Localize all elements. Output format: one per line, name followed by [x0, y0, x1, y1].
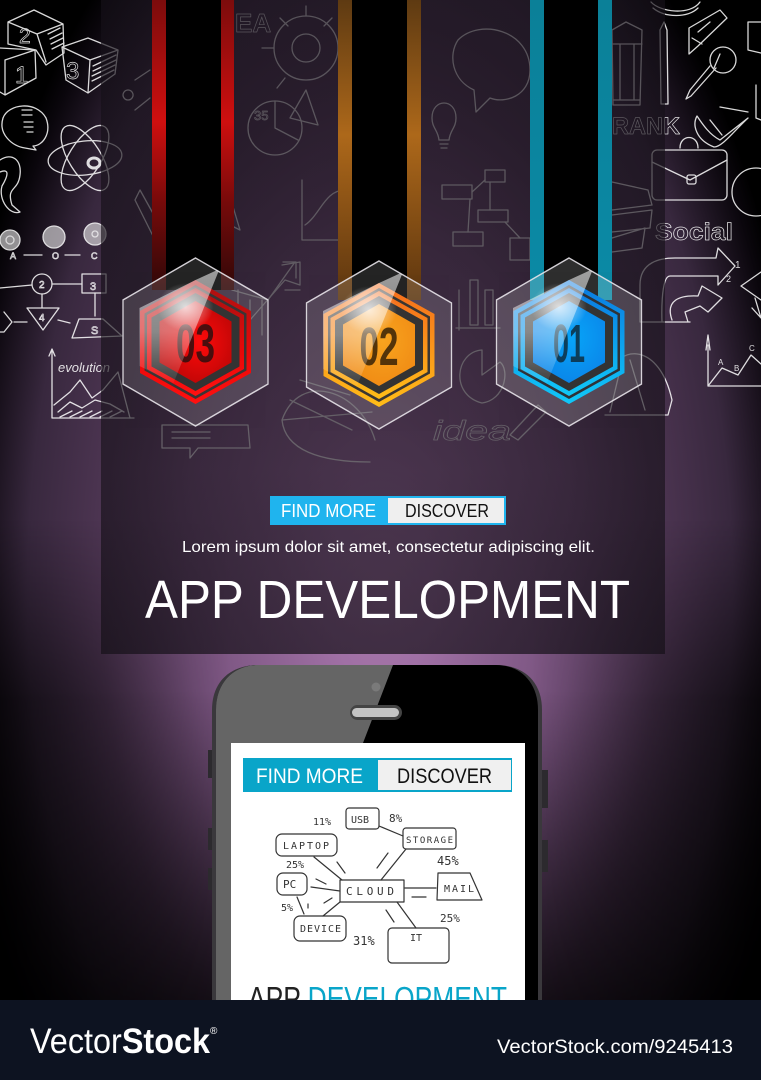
badge: 02 [306, 261, 452, 429]
doodle: evolution chart [49, 349, 134, 418]
doodle: flowchart: S [91, 325, 98, 337]
number: 02 [360, 317, 398, 377]
doodle: RANK: RANK [612, 113, 681, 140]
percent labels: 11% [313, 817, 331, 828]
doodles: under panel [123, 6, 681, 462]
arrows [308, 853, 426, 922]
doodle: arrows: 2 [726, 274, 731, 284]
badge: 01 [496, 258, 642, 426]
doodle: book stack [612, 182, 652, 252]
doodle: bars [456, 280, 500, 330]
glare [140, 269, 220, 383]
node: DEVICE: DEVICE [300, 924, 341, 935]
doodle: atom [46, 118, 124, 198]
doodle: discs: A [10, 251, 16, 261]
doodle: flowchart: 2 [39, 280, 45, 291]
number: 01 [553, 314, 585, 374]
percent labels: 31% [353, 934, 375, 948]
node: MAIL: MAIL [444, 884, 474, 895]
doodle: arrows [640, 248, 741, 322]
doodle: glasses [695, 107, 748, 147]
node: CLOUD [340, 880, 404, 902]
percent labels: 8% [389, 812, 403, 825]
node: USB [346, 808, 379, 829]
percent labels: 5% [281, 903, 293, 914]
panel: dark overlay [101, 0, 665, 654]
doodle: discs: O [52, 251, 59, 261]
phone title: APP DEVELOPMENT [248, 980, 507, 1017]
percent labels: 25% [286, 860, 304, 871]
node: IT: IT [410, 933, 422, 944]
button: find more / discover [270, 496, 506, 525]
node: PC: PC [283, 878, 296, 891]
phone button: DISCOVER [397, 765, 492, 788]
doodle: discs [0, 223, 106, 261]
glare [323, 272, 403, 386]
doodle: pencil small [510, 405, 546, 440]
node: CLOUD: CLOUD [346, 885, 394, 898]
cloud diagram [276, 808, 482, 963]
doodle: keyboard bubble [162, 425, 250, 458]
doodle: Social: Social [655, 219, 733, 246]
footer registered mark: ® [210, 1026, 218, 1037]
doodle: mushroom sketch [605, 354, 672, 415]
phone body [212, 665, 542, 1005]
phone glare [216, 665, 393, 1005]
node: USB: USB [351, 815, 369, 826]
doodle: pie sketch [460, 350, 505, 403]
doodle: pencil [612, 22, 668, 105]
percent labels: 25% [440, 912, 460, 925]
footer bar [0, 1000, 761, 1080]
node: IT [388, 928, 449, 963]
title: APP DEVELOPMENT [145, 570, 630, 630]
doodle: pie chart: 35 [254, 108, 268, 123]
doodle: screen icons [748, 22, 761, 120]
glare [513, 269, 593, 383]
doodle: line chart: C [749, 344, 755, 353]
doodle: briefcase [652, 138, 727, 200]
badge: 03 [123, 258, 268, 426]
ribbon: blue 01 [530, 0, 612, 300]
doodle: number cubes: 2 [19, 25, 31, 48]
doodles: left column [0, 10, 134, 418]
doodle: pencil [689, 10, 727, 54]
doodle: clock [732, 168, 761, 216]
doodle: coin stack [651, 2, 700, 16]
doodle: idea: idea [433, 415, 511, 446]
doodle: letters IDEA: EA [235, 8, 271, 38]
doodle: graph sketches [160, 180, 350, 300]
doodle: flowchart [0, 274, 122, 338]
footer logo: VectorStock [30, 1022, 210, 1061]
button: find more / discover: FIND MORE [281, 501, 376, 521]
button: find more / discover: DISCOVER [405, 501, 489, 521]
connectors [297, 826, 436, 928]
percent labels [281, 812, 460, 948]
doodle: flowchart: 3 [90, 281, 96, 293]
phone side buttons [208, 750, 548, 890]
doodles: right column [640, 2, 761, 386]
doodle: number cubes: 1 [15, 62, 28, 89]
node: MAIL [437, 873, 482, 900]
camera [372, 682, 380, 692]
doodle: magnifier [686, 47, 736, 99]
doodle: vertical note lines [123, 70, 165, 240]
phone button: FIND MORE [256, 765, 363, 788]
doodle: line chart [706, 335, 761, 386]
node: LAPTOP: LAPTOP [283, 841, 329, 852]
text: subtitle: Lorem ipsum dolor sit amet, consectetur adipiscing elit. [182, 539, 595, 556]
footer url: VectorStock.com/9245413 [497, 1037, 733, 1058]
node: STORAGE: STORAGE [406, 836, 453, 846]
doodle: light bulb [432, 103, 456, 148]
phone button [243, 758, 512, 792]
ribbon: red 03 [152, 0, 234, 290]
doodle: envelope sketch [282, 380, 375, 462]
node: LAPTOP [276, 834, 337, 856]
doodle: flowchart: 4 [39, 313, 45, 324]
doodle: line chart: A [718, 358, 724, 367]
doodle: pie chart [248, 90, 318, 155]
doodle: growth arrow [250, 262, 300, 320]
doodle: gear [262, 6, 348, 88]
node: DEVICE [294, 916, 346, 941]
doodle: list speech bubble [2, 106, 48, 150]
number: 03 [176, 314, 215, 374]
doodle: number cubes: 3 [66, 58, 79, 85]
phone screen [231, 743, 525, 1005]
doodle: number cubes [0, 10, 118, 95]
doodle: column labels [238, 290, 262, 335]
phone [208, 665, 548, 1017]
doodle: arrows: 1 [735, 260, 741, 271]
doodle: mortarboard [741, 272, 761, 318]
percent labels: 45% [437, 854, 459, 868]
doodle: network sketch [442, 170, 530, 260]
doodle: speech bubble [453, 29, 530, 112]
ribbon: orange 02 [338, 0, 421, 300]
doodle: question mark [0, 157, 20, 213]
speaker [350, 705, 402, 720]
node: STORAGE [403, 828, 456, 849]
doodle: line chart: B [734, 364, 739, 373]
doodle: evolution chart: evolution [58, 360, 110, 375]
node: PC [277, 873, 307, 895]
doodle: discs: C [91, 251, 98, 261]
